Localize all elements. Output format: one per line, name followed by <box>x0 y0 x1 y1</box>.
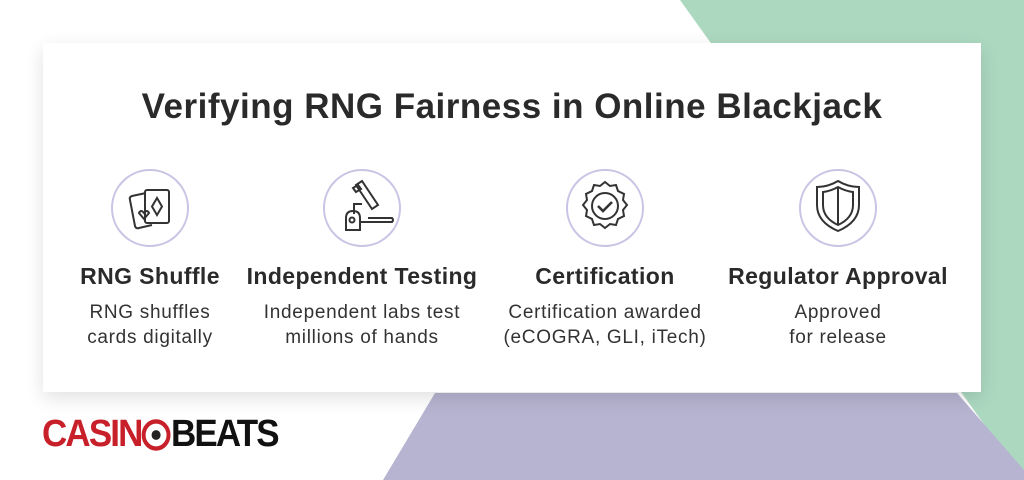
icon: shield <box>799 169 877 247</box>
step: Independent Testing <box>247 169 477 348</box>
logo: CasinoBeats: CASIN <box>42 413 142 455</box>
step: Regulator Approval: Approved <box>795 302 881 323</box>
step: Certification: Certification <box>535 263 675 289</box>
step: Regulator Approval <box>728 169 948 348</box>
step: Regulator Approval: Regulator Approval <box>728 263 948 289</box>
logo: CasinoBeats <box>42 413 278 455</box>
step: Independent Testing: Independent labs test <box>264 302 460 323</box>
card <box>43 43 981 392</box>
icon: badge check <box>566 169 644 247</box>
title: Verifying RNG Fairness in Online Blackjack <box>142 87 882 126</box>
step: Independent Testing: millions of hands <box>285 327 439 348</box>
step: Certification: Certification awarded <box>508 302 702 323</box>
step: Certification <box>504 169 706 348</box>
step: RNG Shuffle: RNG Shuffle <box>80 263 220 289</box>
step: RNG Shuffle <box>80 169 220 348</box>
step: Regulator Approval: for release <box>789 327 887 348</box>
logo: CasinoBeats: BEATS <box>171 413 278 455</box>
step: Certification: (eCOGRA, GLI, iTech) <box>504 327 706 348</box>
icon: cards <box>111 169 189 247</box>
icon: microscope <box>323 169 401 247</box>
step: Independent Testing: Independent Testing <box>247 263 477 289</box>
step: RNG Shuffle: RNG shuffles <box>89 302 211 323</box>
step: RNG Shuffle: cards digitally <box>87 327 213 348</box>
